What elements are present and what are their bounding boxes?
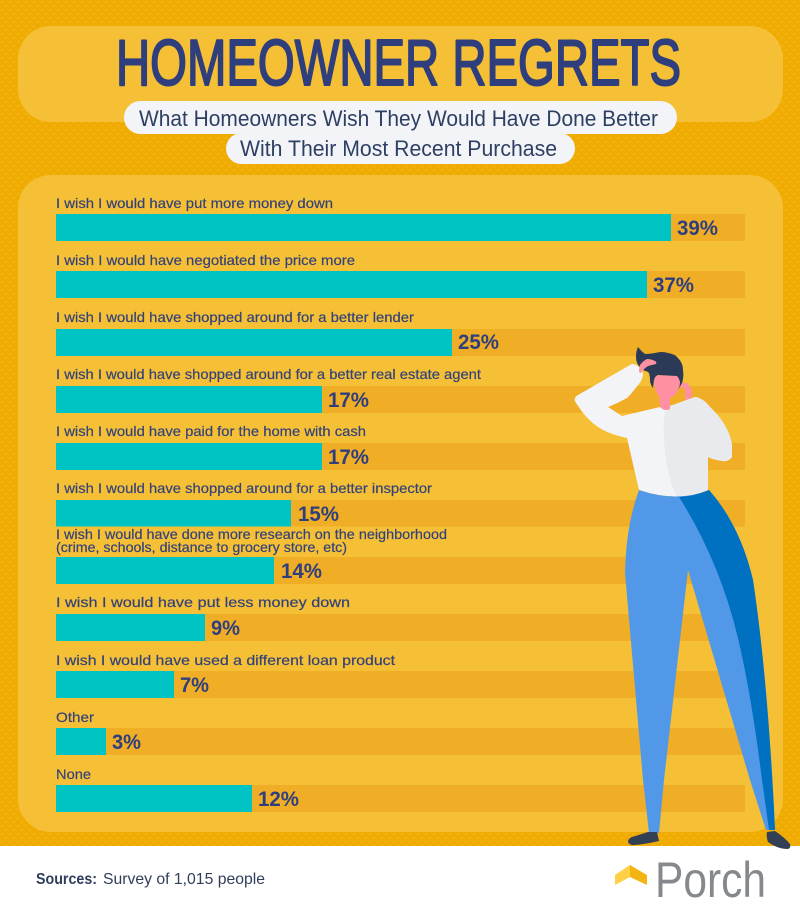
sources note: Sources:	[36, 871, 97, 888]
row: better inspector	[56, 480, 745, 526]
row: paid with cash: I wish I would have paid for the home with cash	[56, 423, 366, 439]
row: negotiated the price: 37%	[653, 274, 694, 297]
bar chart	[56, 195, 745, 812]
sources note: Survey of 1,015 people	[103, 871, 265, 888]
row: different loan product: 7%	[180, 674, 209, 697]
illustration: confused man	[575, 347, 790, 849]
row: less money down	[56, 594, 745, 641]
subtitle pills: With Their Most Recent Purchase	[240, 136, 557, 161]
row: neighborhood research	[56, 526, 745, 584]
header panel	[18, 26, 783, 122]
row: better agent	[56, 366, 745, 413]
row: less money down: 9%	[211, 617, 240, 640]
porch logo	[615, 852, 766, 908]
row: less money down: I wish I would have put less money down	[56, 594, 350, 610]
right shoe	[767, 831, 790, 849]
shirt	[575, 364, 732, 496]
row: none	[56, 766, 745, 812]
row: better inspector: 15%	[298, 503, 339, 526]
row: better agent: I wish I would have shopped around for a better real estate agent	[56, 366, 481, 382]
shirt shadow	[664, 397, 732, 497]
face	[654, 375, 680, 398]
row: better lender	[56, 309, 745, 356]
row: put more money down: I wish I would have put more money down	[56, 195, 333, 211]
row: better lender: 25%	[458, 331, 499, 354]
row: negotiated the price: I wish I would have negotiated the price more	[56, 252, 355, 268]
row: other	[56, 709, 745, 755]
row: neighborhood research: 14%	[281, 560, 322, 583]
row: different loan product: I wish I would have used a different loan product	[56, 652, 395, 668]
footer band	[0, 846, 800, 914]
row: neighborhood research: I wish I would have done more research on the neighborhood	[56, 526, 447, 542]
chart panel	[18, 175, 783, 832]
row: other: 3%	[112, 731, 141, 754]
subtitle pills: What Homeowners Wish They Would Have Done Better	[139, 106, 658, 131]
row: better agent: 17%	[328, 389, 369, 412]
logo wordmark: Porch	[655, 852, 766, 908]
row: paid with cash: 17%	[328, 446, 369, 469]
row: neighborhood research: (crime, schools, distance to grocery store, etc)	[56, 539, 347, 555]
subtitle pills	[124, 101, 677, 164]
row: better inspector: I wish I would have shopped around for a better inspector	[56, 480, 432, 496]
trousers	[625, 490, 775, 833]
left shoe	[628, 832, 659, 845]
row: paid with cash	[56, 423, 745, 470]
row: negotiated the price	[56, 252, 745, 298]
hair	[636, 347, 683, 390]
near hand on head	[639, 359, 656, 373]
row: put more money down	[56, 195, 745, 241]
row: different loan product	[56, 652, 745, 698]
trouser shadow	[679, 490, 775, 830]
row: none: 12%	[258, 788, 299, 811]
row: none: None	[56, 766, 91, 782]
row: put more money down: 39%	[677, 217, 718, 240]
row: other: Other	[56, 709, 94, 725]
neck	[659, 395, 670, 411]
far hand behind neck	[680, 383, 692, 401]
logo mark	[615, 865, 647, 885]
row: better lender: I wish I would have shopped around for a better lender	[56, 309, 414, 325]
